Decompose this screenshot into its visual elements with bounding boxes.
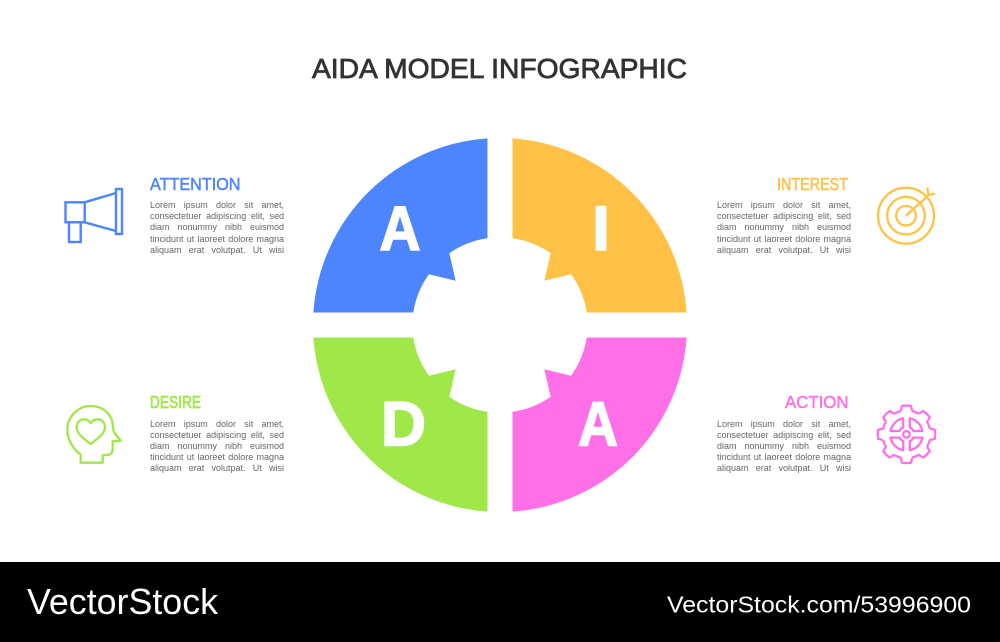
title: AIDA MODEL INFOGRAPHIC	[312, 53, 687, 84]
text block: action: consectetuer adipiscing elit, sed	[717, 430, 851, 440]
image id text: VectorStock.com/53996900	[667, 592, 971, 618]
circular AIDA diagram	[313, 138, 687, 512]
segment: A action (pink): A	[578, 390, 618, 460]
text block: desire: consectetuer adipiscing elit, sed	[150, 430, 284, 440]
text block: attention: tincidunt ut laoreet dolore magna	[150, 234, 284, 244]
text block: desire: diam nonummy nibh euismod	[150, 441, 284, 451]
panel: interest	[717, 174, 936, 255]
segment: A attention (blue): A	[380, 194, 420, 264]
text block: desire: tincidunt ut laoreet dolore magna	[150, 452, 284, 462]
icon: gear	[876, 404, 936, 464]
text block: action	[717, 418, 851, 473]
text block: action: Lorem ipsum dolor sit amet,	[717, 418, 851, 428]
text block: action: tincidunt ut laoreet dolore magna	[717, 452, 851, 462]
text block: interest: consectetuer adipiscing elit, sed	[717, 211, 851, 221]
logo text: VectorStock	[27, 581, 219, 622]
icon: head with heart	[66, 404, 122, 464]
segment: D desire (green): D	[381, 390, 426, 460]
icon: target with arrow	[876, 186, 936, 245]
text block: interest: tincidunt ut laoreet dolore magna	[717, 234, 851, 244]
heading: desire: DESIRE	[150, 392, 201, 412]
text block: action: aliquam erat volutpat. Ut wisi	[717, 463, 851, 473]
segment: A attention (blue)	[313, 138, 488, 312]
segment: A action (pink)	[512, 338, 687, 512]
text block: attention: consectetuer adipiscing elit, sed	[150, 211, 284, 221]
footer watermark bar	[0, 562, 1000, 642]
text block: desire: Lorem ipsum dolor sit amet,	[150, 418, 284, 428]
panel: action	[717, 392, 936, 473]
text block: interest: diam nonummy nibh euismod	[717, 222, 851, 232]
panel: desire	[66, 392, 284, 473]
text block: action: diam nonummy nibh euismod	[717, 441, 851, 451]
text block: desire: aliquam erat volutpat. Ut wisi	[150, 463, 284, 473]
segment: D desire (green)	[313, 338, 488, 512]
panel: attention	[64, 174, 284, 255]
heading: interest: INTEREST	[777, 174, 848, 194]
icon: megaphone	[64, 188, 124, 244]
heading: attention: ATTENTION	[150, 174, 240, 194]
text block: attention: diam nonummy nibh euismod	[150, 222, 284, 232]
text block: interest: aliquam erat volutpat. Ut wisi	[717, 245, 851, 255]
text block: attention	[150, 200, 284, 255]
text block: attention: Lorem ipsum dolor sit amet,	[150, 200, 284, 210]
text block: desire	[150, 418, 284, 473]
text block: interest: Lorem ipsum dolor sit amet,	[717, 200, 851, 210]
heading: action: ACTION	[785, 392, 848, 412]
segment: I interest (yellow): I	[592, 194, 610, 264]
text block: attention: aliquam erat volutpat. Ut wisi	[150, 245, 284, 255]
text block: interest	[717, 200, 851, 255]
segment: I interest (yellow)	[512, 138, 687, 312]
